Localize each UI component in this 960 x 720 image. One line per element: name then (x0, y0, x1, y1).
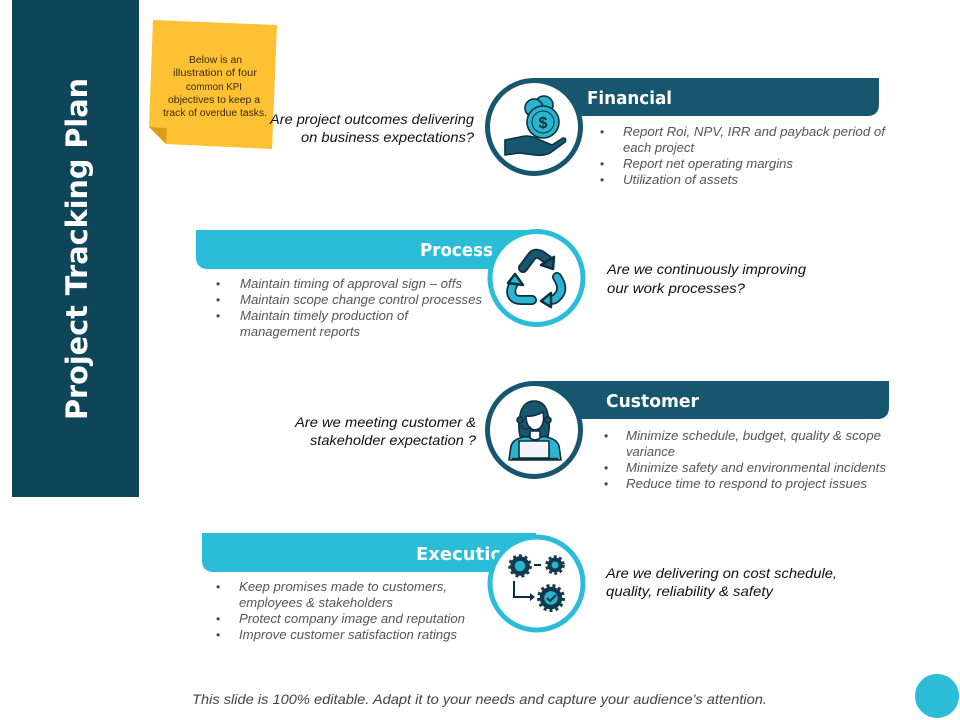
icon: gears workflow (510, 556, 564, 610)
financial heading: Financial (587, 88, 672, 109)
process bullets: management reports (240, 325, 360, 339)
execution bullets: Protect company image and reputation (239, 612, 465, 626)
customer bullets: Reduce time to respond to project issues (626, 477, 867, 491)
panel: process (196, 230, 806, 339)
execution heading: Execution (416, 544, 516, 565)
execution bullets (216, 580, 465, 642)
icon: coins over hand (505, 96, 566, 155)
process banner (196, 230, 536, 269)
customer bullets: variance (626, 445, 675, 459)
financial bullets: • (600, 157, 604, 171)
sticky text: common KPI (186, 82, 242, 93)
execution bullets: Improve customer satisfaction ratings (239, 628, 457, 642)
customer bullets: • (604, 461, 608, 475)
icon: recycle arrows (508, 254, 561, 307)
customer bullets: • (604, 477, 608, 491)
execution bullets: • (216, 628, 220, 642)
footer note: This slide is 100% editable. Adapt it to your needs and capture your audience's attention. (192, 691, 767, 707)
sticky text: objectives to keep a (168, 95, 260, 106)
process question: our work processes? (607, 280, 745, 296)
financial bullets: Report Roi, NPV, IRR and payback period of (623, 125, 887, 139)
execution question (605, 565, 837, 599)
title: Project Tracking Plan (60, 78, 94, 420)
customer question: Are we meeting customer & (294, 414, 476, 430)
process bullets: Maintain scope change control processes (240, 293, 482, 307)
panel: execution (202, 533, 837, 642)
execution banner (202, 533, 536, 572)
panel: customer (294, 381, 889, 491)
customer heading: Customer (606, 391, 699, 412)
customer ring (488, 384, 580, 476)
execution bullets: employees & stakeholders (239, 596, 393, 610)
financial bullets: • (600, 125, 604, 139)
financial question (269, 111, 474, 145)
execution bullets: • (216, 580, 220, 594)
icon: coins over hand: $ (539, 115, 548, 132)
process bullets: Maintain timely production of (240, 309, 410, 323)
process bullets: • (216, 293, 220, 307)
sticky fold (149, 127, 167, 144)
customer banner (534, 381, 889, 419)
financial question: Are project outcomes delivering (269, 111, 474, 127)
execution bullets: Keep promises made to customers, (239, 580, 447, 594)
customer bullets: Minimize safety and environmental incidents (626, 461, 886, 475)
customer bullets: • (604, 429, 608, 443)
sticky note (149, 20, 277, 149)
financial bullets: Utilization of assets (623, 173, 738, 187)
customer question (294, 414, 476, 448)
sidebar panel with title (12, 0, 139, 497)
execution question: quality, reliability & safety (606, 583, 774, 599)
financial ring (488, 80, 580, 174)
process heading: Process (420, 240, 493, 261)
process ring (490, 232, 583, 324)
financial bullets (600, 125, 887, 187)
process bullets (216, 277, 482, 339)
execution bullets: • (216, 612, 220, 626)
execution ring (490, 537, 583, 630)
sticky text (163, 55, 267, 119)
financial bullets: Report net operating margins (623, 157, 793, 171)
financial question: on business expectations? (301, 129, 474, 145)
corner circle (915, 674, 959, 718)
customer bullets (604, 429, 886, 491)
financial bullets: each project (623, 141, 695, 155)
sticky text: track of overdue tasks. (163, 108, 267, 119)
process bullets: Maintain timing of approval sign – offs (240, 277, 462, 291)
financial bullets: • (600, 173, 604, 187)
customer bullets: Minimize schedule, budget, quality & scope (626, 429, 881, 443)
financial banner (534, 78, 879, 116)
process question: Are we continuously improving (606, 261, 806, 277)
execution question: Are we delivering on cost schedule, (605, 565, 837, 581)
customer question: stakeholder expectation ? (310, 432, 476, 448)
sticky text: illustration of four (173, 68, 258, 79)
icon: headset agent with laptop (509, 401, 561, 460)
process question (606, 261, 806, 296)
sticky text: Below is an (189, 55, 242, 66)
panel: financial (269, 78, 887, 187)
process bullets: • (216, 277, 220, 291)
process bullets: • (216, 309, 220, 323)
